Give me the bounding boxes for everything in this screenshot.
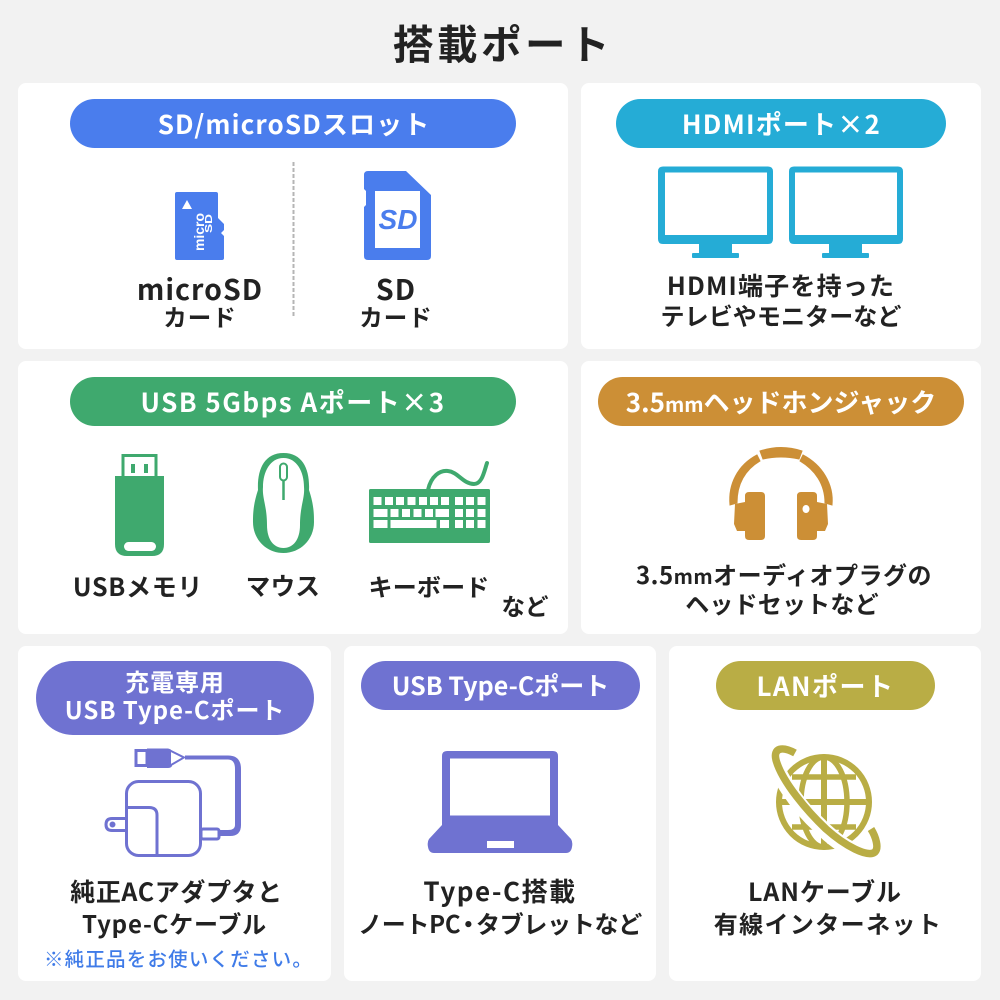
text: HDMI devices: HDMI端子を持った: [667, 267, 895, 303]
text: LAN: LANケーブル: [748, 873, 902, 909]
heading: charging USB-C: [36, 661, 314, 735]
text: USB-C devices: Type-C搭載: [423, 872, 577, 909]
text: headset: [636, 556, 932, 620]
text: HDMI devices: [660, 267, 902, 332]
text: headset: ヘッドセットなど: [685, 585, 879, 620]
icon: laptop: [428, 751, 572, 853]
icon: charger and cable: [106, 748, 241, 856]
heading: SD slot: SD/microSDスロット: [158, 105, 430, 142]
text: charger: Type-Cケーブル: [82, 905, 267, 940]
icon: USB memory: [115, 456, 164, 556]
panel: HDMI: [581, 83, 981, 349]
icon: headphones: [730, 448, 832, 540]
icon: microSD card: SD: [204, 214, 215, 233]
label: SD card: [359, 268, 433, 333]
label: SD card: カード: [359, 299, 433, 333]
label: USB memory: USBメモリ: [73, 568, 203, 604]
text: headset: 3.5mmオーディオプラグの: [636, 556, 932, 591]
text: charger: [70, 873, 283, 940]
label: etc: など: [502, 588, 548, 622]
icon: SD card: SD: [379, 204, 417, 235]
label: microSD card: カード: [163, 299, 237, 333]
text: USB-C devices: ノートPC・タブレットなど: [358, 905, 642, 940]
heading: LAN: [716, 661, 935, 710]
heading: USB A: [70, 377, 516, 426]
title: 搭載ポート: [393, 12, 613, 71]
label: microSD card: [137, 268, 263, 333]
icon: globe: [772, 747, 882, 854]
panel: USB-C: [344, 646, 656, 981]
icon: monitor right: [789, 166, 903, 258]
icon: microSD card: micro: [191, 213, 207, 251]
heading: headphone jack: [598, 377, 964, 426]
icon: SD card: [364, 171, 431, 260]
heading: USB A: USB 5Gbps Aポート×3: [140, 383, 446, 420]
label: keyboard: キーボード: [368, 568, 490, 603]
panel: LAN: [669, 646, 981, 981]
text: LAN: 有線インターネット: [714, 905, 942, 940]
heading: USB-C: USB Type-Cポート: [392, 667, 609, 703]
icon: monitor left: [658, 166, 773, 258]
panel: USB A: [18, 361, 568, 634]
heading: SD slot: [70, 99, 516, 148]
heading: charging USB-C: 充電専用: [125, 663, 225, 698]
text: LAN: [714, 873, 942, 940]
text: USB-C devices: [358, 872, 642, 940]
icon: mouse: [253, 453, 314, 553]
heading: HDMI: HDMIポート×2: [682, 105, 881, 142]
note: genuine parts: ※純正品をお使いください。: [44, 943, 313, 972]
icon: microSD card: [175, 192, 224, 260]
panel: charging USB-C: [18, 646, 331, 981]
label: microSD card: microSD: [137, 268, 263, 309]
label: mouse: マウス: [246, 568, 320, 603]
label: SD card: SD: [376, 268, 416, 309]
heading: LAN: LANポート: [756, 667, 895, 704]
panel: SD slot: [18, 83, 568, 349]
heading: HDMI: [616, 99, 946, 148]
icon: keyboard: [369, 463, 490, 543]
text: charger: 純正ACアダプタと: [70, 873, 283, 909]
panel: headphone jack: [581, 361, 981, 634]
heading: headphone jack: 3.5mmヘッドホンジャック: [626, 383, 936, 420]
text: HDMI devices: テレビやモニターなど: [660, 297, 902, 332]
heading: charging USB-C: USB Type-Cポート: [65, 691, 285, 726]
heading: USB-C: [361, 661, 640, 710]
